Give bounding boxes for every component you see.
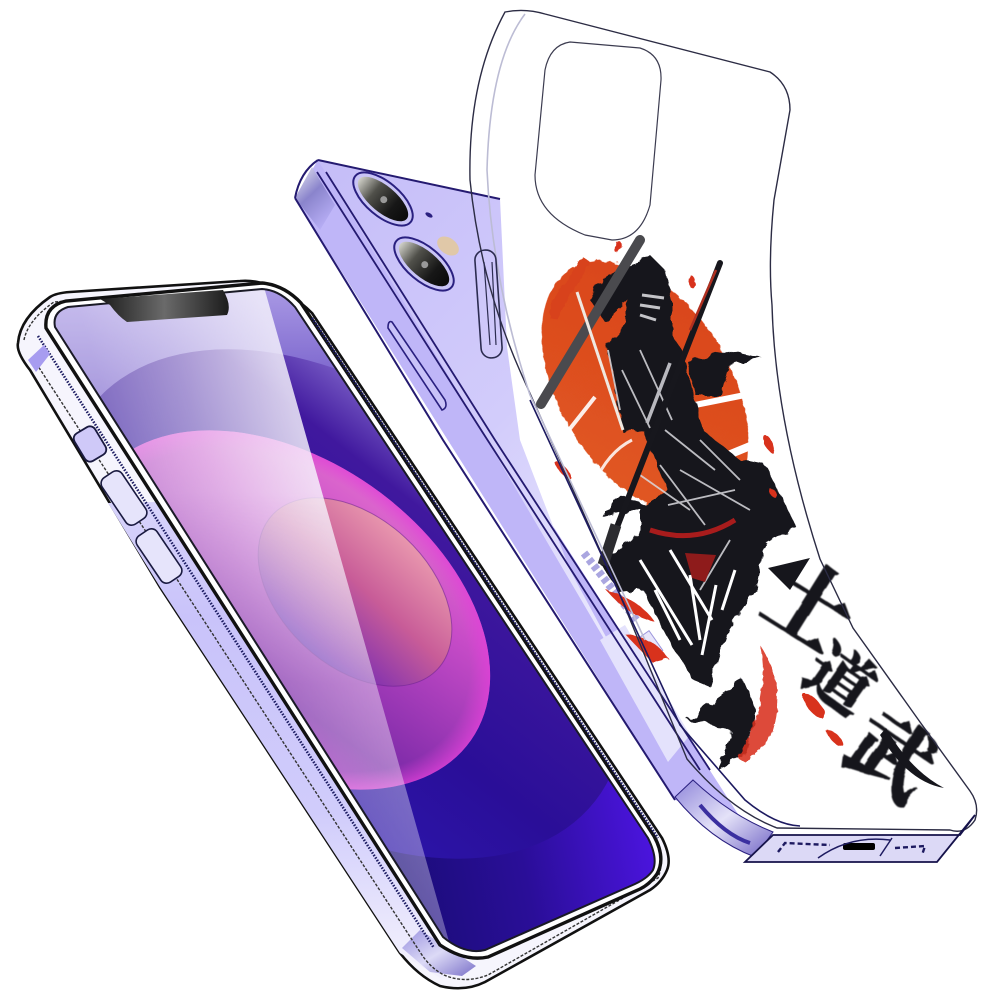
side volume button xyxy=(388,322,446,410)
large circle xyxy=(100,349,608,859)
case inner fold line xyxy=(487,14,645,640)
case print xyxy=(499,224,964,825)
microphone dot xyxy=(425,211,433,219)
dark red cloth xyxy=(685,553,716,582)
camera lens top xyxy=(344,163,422,235)
brush sweep xyxy=(880,728,944,788)
inner button line xyxy=(484,262,496,345)
red sash xyxy=(650,520,735,536)
volume up button xyxy=(98,468,150,528)
phone outlines xyxy=(295,160,675,800)
screen border xyxy=(55,289,655,951)
wallpaper top xyxy=(56,290,335,396)
red splashes xyxy=(552,240,846,762)
port surround xyxy=(818,838,892,858)
lower case edge lines xyxy=(530,400,800,826)
corner tint xyxy=(28,345,50,372)
screen xyxy=(56,290,654,950)
side button cover xyxy=(474,249,503,359)
wallpaper base xyxy=(389,780,654,950)
case outer outline xyxy=(470,10,977,831)
top corner highlight xyxy=(295,167,335,230)
helmet highlight xyxy=(640,295,664,320)
lower corner tint xyxy=(402,930,476,976)
lower white scratches xyxy=(640,550,735,655)
volume down button xyxy=(133,526,185,586)
glass glare xyxy=(56,290,448,940)
staff end xyxy=(603,525,616,565)
side band of back phone xyxy=(295,160,745,825)
camera lens bottom xyxy=(385,228,463,300)
dotted inner band xyxy=(38,318,658,948)
pale lower side strip xyxy=(600,625,690,762)
brush horn xyxy=(768,558,810,590)
second staff xyxy=(603,263,720,563)
notch xyxy=(100,290,229,322)
speaker grille right xyxy=(895,846,925,855)
back phone xyxy=(295,160,745,825)
bottom face xyxy=(745,815,975,862)
frame fill xyxy=(18,281,669,988)
speaker grille left xyxy=(778,843,830,852)
back face of phone xyxy=(318,160,640,700)
case bottom corner and ports xyxy=(675,780,975,862)
speaker slot side xyxy=(700,805,750,843)
inner circle xyxy=(258,498,452,687)
bezel xyxy=(46,283,661,958)
sun white gaps xyxy=(561,395,760,484)
camera cutout xyxy=(535,42,661,240)
calligraphy characters: 道 xyxy=(789,618,897,733)
flash xyxy=(434,233,462,259)
calligraphy characters xyxy=(740,519,964,825)
thin sword xyxy=(577,292,623,430)
front phone xyxy=(16,280,670,990)
armour highlights xyxy=(608,350,750,590)
long staff xyxy=(541,240,640,404)
clear case xyxy=(470,10,977,831)
red sun xyxy=(499,224,791,552)
pink circle xyxy=(134,430,490,790)
engraved side marks xyxy=(584,553,638,622)
frame double line xyxy=(24,287,661,980)
lavender left band xyxy=(108,502,470,978)
pink circle rim xyxy=(134,430,490,790)
side port mark xyxy=(639,631,663,657)
charging port xyxy=(843,843,875,850)
side switch xyxy=(71,424,109,464)
calligraphy characters: 武 xyxy=(825,678,964,825)
corner band xyxy=(675,780,773,857)
calligraphy characters: 士 xyxy=(740,519,885,677)
sun splatter xyxy=(550,256,590,320)
warrior figure xyxy=(590,255,797,770)
